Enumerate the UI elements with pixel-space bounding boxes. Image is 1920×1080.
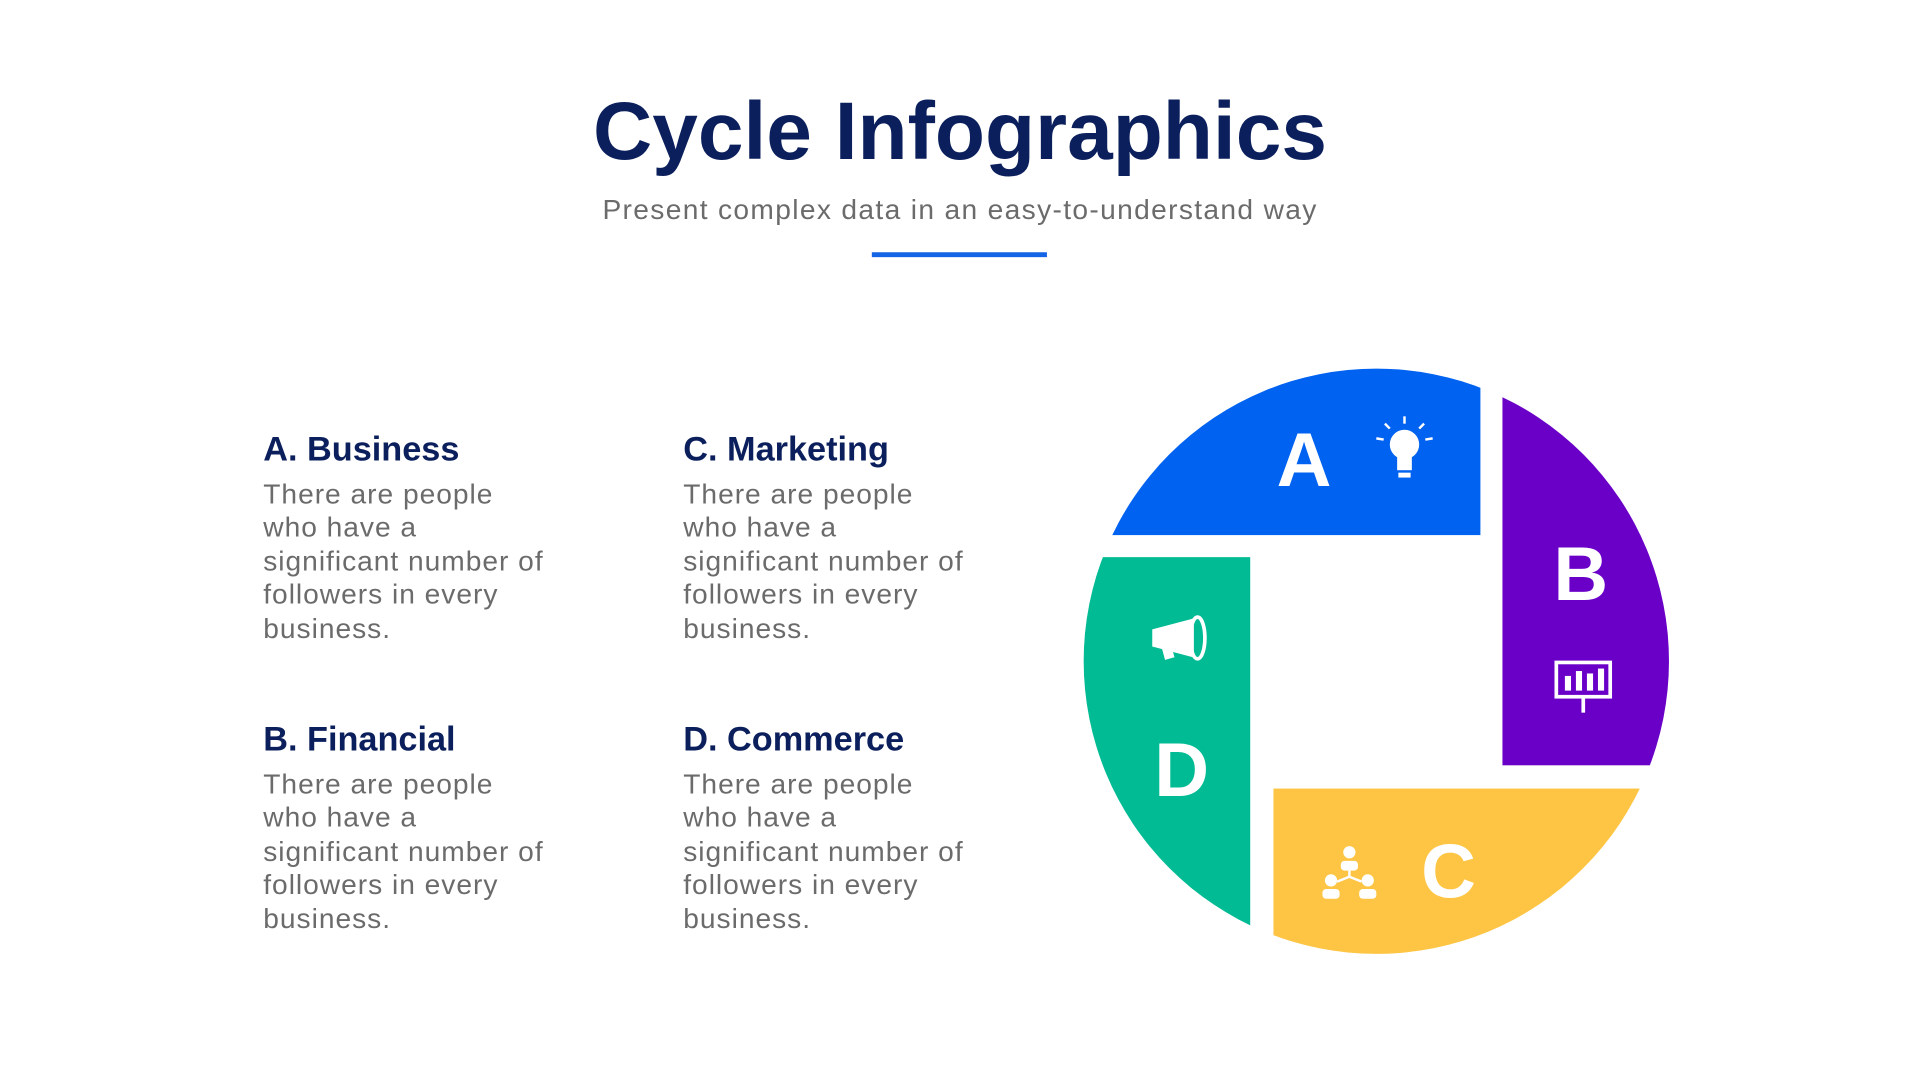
text block: C: business. xyxy=(683,613,811,644)
cycle chart xyxy=(1078,361,1680,966)
text block: D: There are people xyxy=(683,768,913,799)
text block: C: There are people xyxy=(683,478,913,509)
text block: D: D. Commerce xyxy=(683,721,904,759)
subtitle: Present complex data in an easy-to-understand way xyxy=(602,194,1317,225)
text block: D: significant number of xyxy=(683,836,964,867)
icon: megaphone xyxy=(1152,617,1205,660)
text block: A: who have a xyxy=(262,511,417,542)
segment B: B xyxy=(1553,532,1608,617)
segment C xyxy=(1273,788,1640,954)
text block: A: A. Business xyxy=(263,430,459,468)
text block: C: C. Marketing xyxy=(683,430,889,468)
icon: presentation board xyxy=(1556,662,1610,713)
text block: D: business. xyxy=(683,903,811,934)
text block: D xyxy=(682,721,964,934)
text block: B: business. xyxy=(263,903,391,934)
underline xyxy=(872,252,1047,257)
segment A: A xyxy=(1277,418,1331,503)
text block: B: There are people xyxy=(263,768,493,799)
text block: B: B. Financial xyxy=(263,721,456,759)
text block: D: followers in every xyxy=(683,869,918,900)
title: Cycle Infographics xyxy=(593,86,1327,177)
text block: D: who have a xyxy=(682,802,837,833)
text block: A: significant number of xyxy=(263,546,544,577)
text block: A: business. xyxy=(263,613,391,644)
text block: B: who have a xyxy=(262,802,417,833)
text block: C: significant number of xyxy=(683,546,964,577)
text block: A xyxy=(262,430,544,644)
text block: A: There are people xyxy=(263,478,493,509)
text block: A: followers in every xyxy=(263,579,498,610)
text block: C: followers in every xyxy=(683,579,918,610)
icon: light bulb xyxy=(1376,416,1433,478)
segment A xyxy=(1112,368,1480,536)
text block: B xyxy=(262,721,544,934)
text block: C xyxy=(682,430,964,644)
segment D: D xyxy=(1154,728,1209,813)
text block: C: who have a xyxy=(682,511,837,542)
text block: B: followers in every xyxy=(263,869,498,900)
segment D xyxy=(1084,557,1250,926)
segment B xyxy=(1502,397,1669,766)
segment C: C xyxy=(1421,830,1476,915)
icon: people hierarchy xyxy=(1322,846,1376,899)
text block: B: significant number of xyxy=(263,836,544,867)
